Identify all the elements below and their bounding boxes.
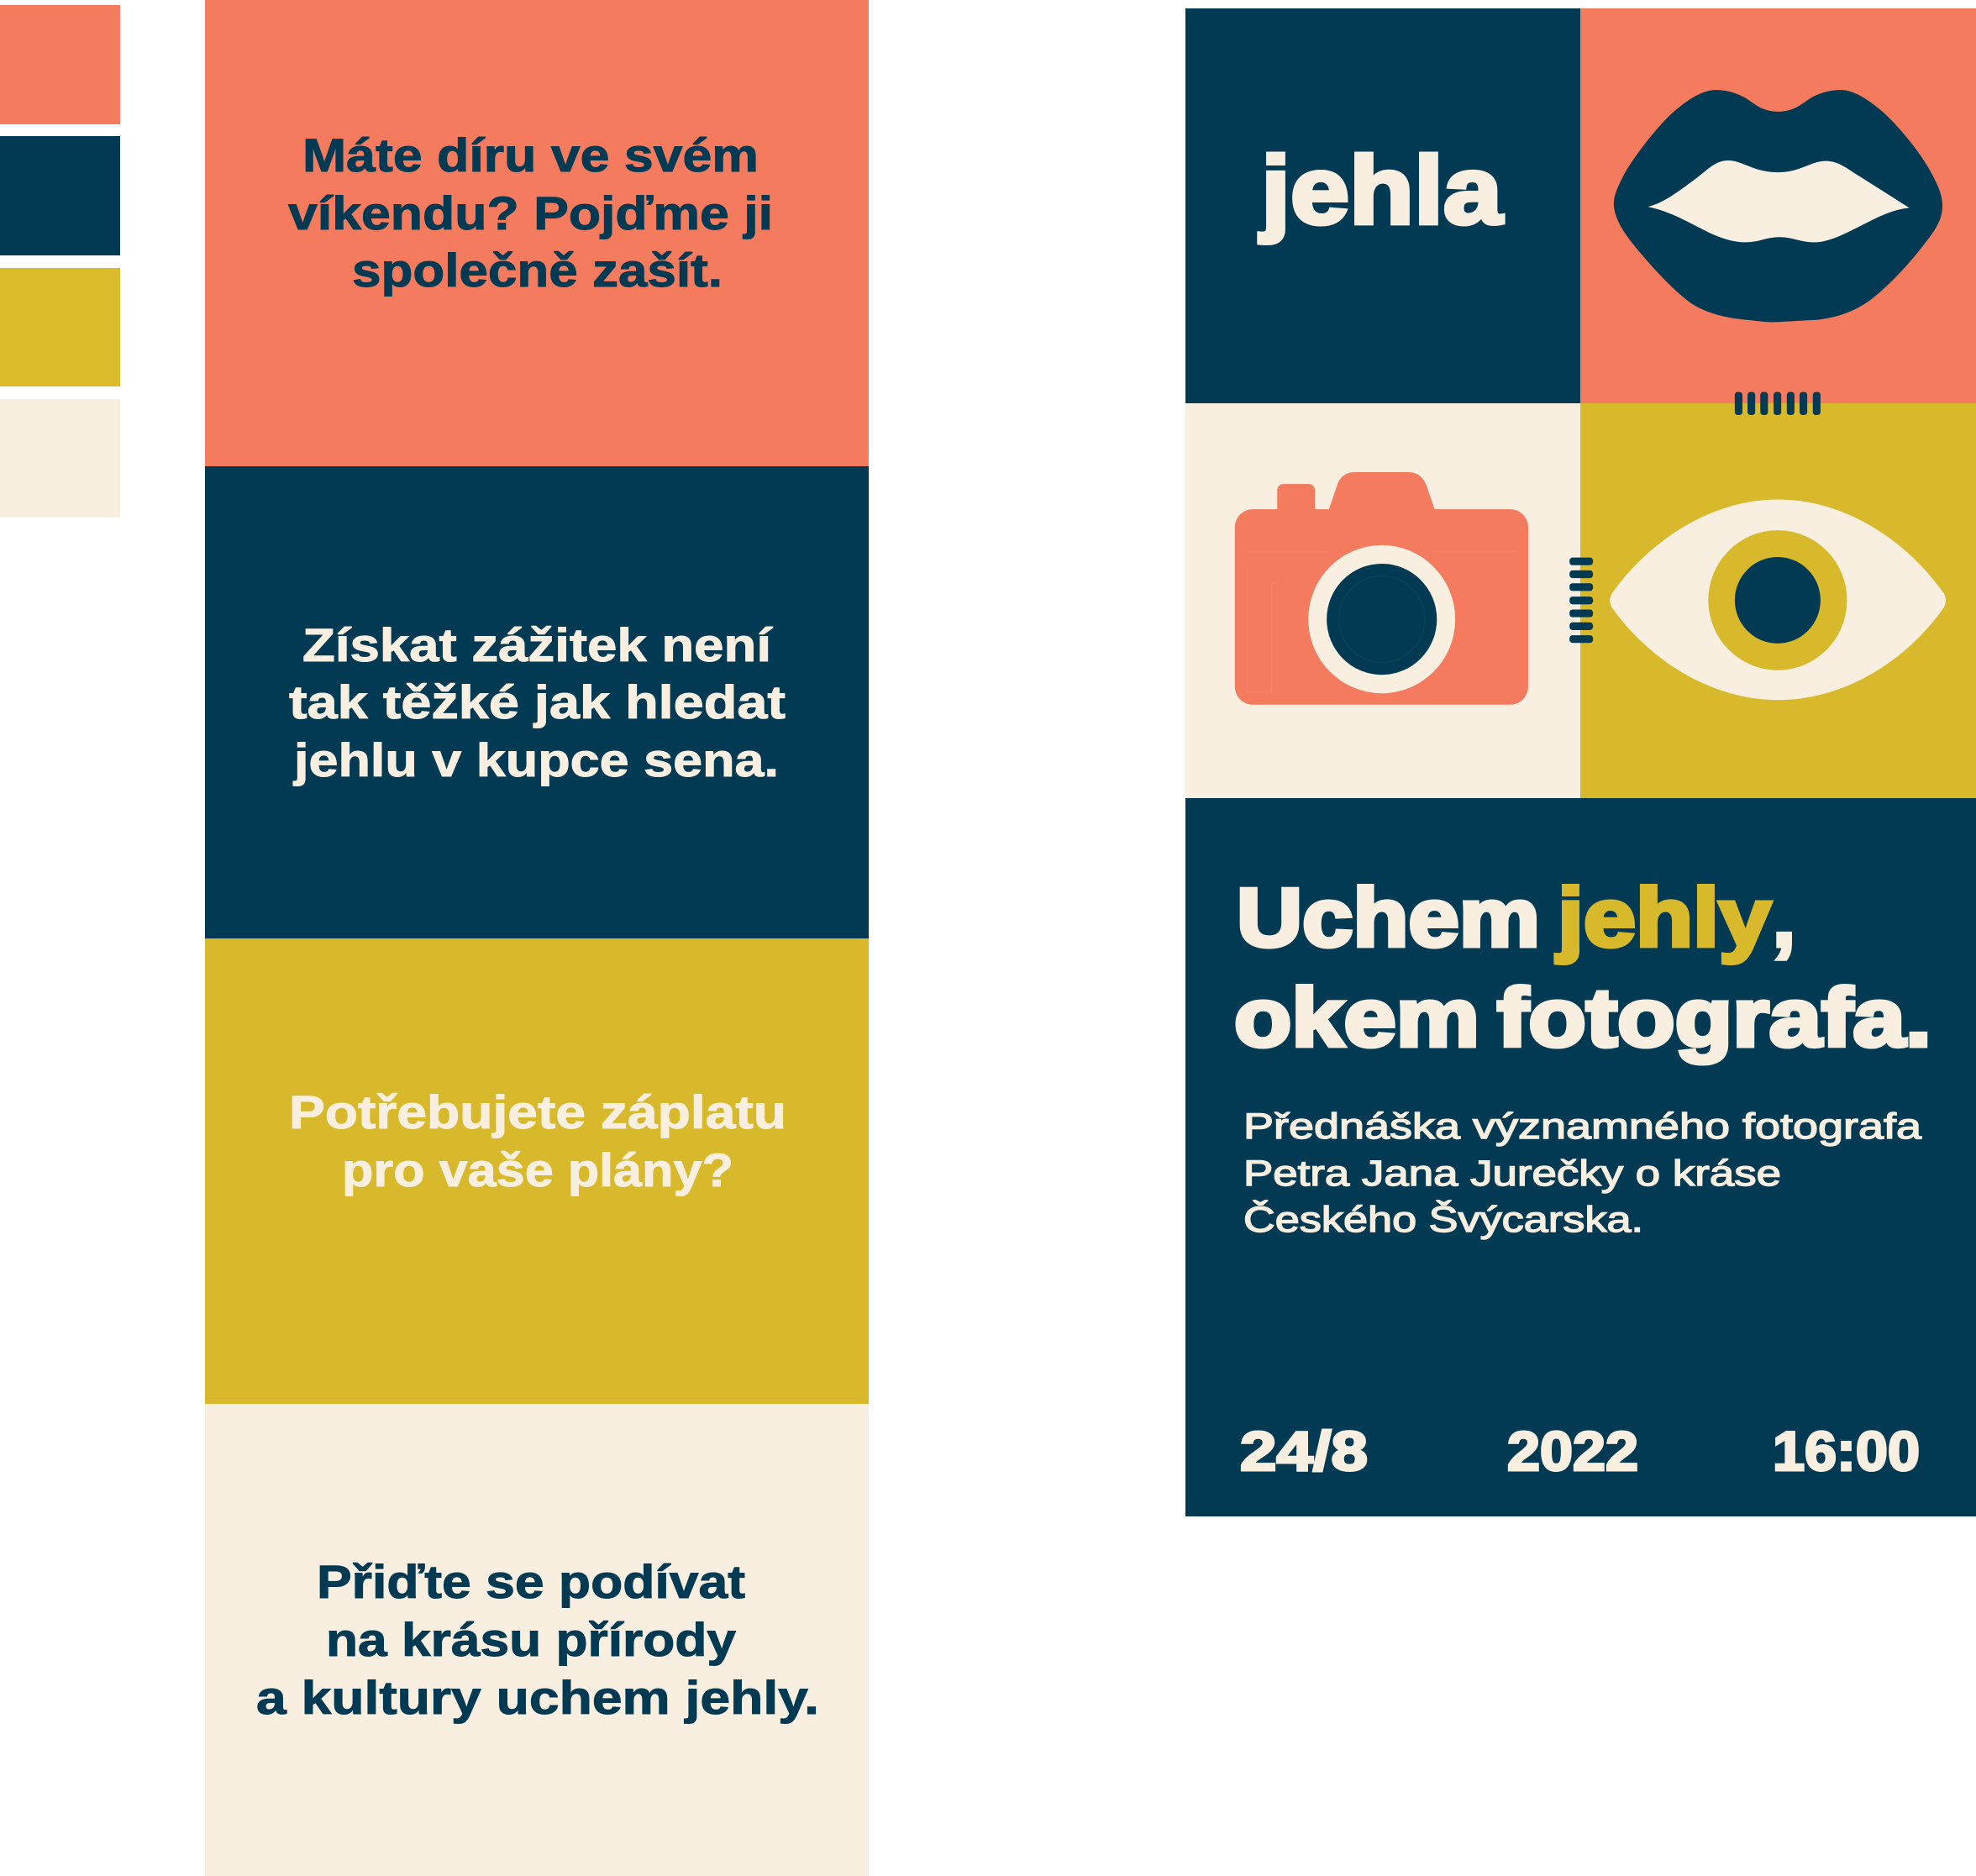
text: come and see: na krásu přírody: [326, 1613, 736, 1666]
logo: jehla: jehla: [1259, 138, 1504, 244]
headline: fotografa.: [1497, 971, 1931, 1064]
text: need a patch: [289, 1085, 786, 1196]
poster cell: eye: [1580, 403, 1976, 798]
swatch: coral: [0, 5, 120, 124]
text: come and see: Přiďte se podívat: [317, 1555, 745, 1608]
icon: camera: [1235, 472, 1528, 705]
headline: Uchem: [1237, 871, 1540, 964]
event date and time: 2022: [1507, 1420, 1638, 1482]
icon: horizontal stitches: [1735, 391, 1821, 415]
description text: Petra Jana Jurečky o kráse: [1243, 1153, 1781, 1194]
swatch: cream: [0, 399, 120, 518]
description text: [1243, 1106, 1921, 1240]
description text: Přednáška významného fotografa: [1243, 1106, 1921, 1147]
panel: cream slogan: [205, 1404, 869, 1876]
event date and time: 16:00: [1773, 1420, 1920, 1482]
text: need a patch: pro vaše plány?: [342, 1143, 733, 1196]
description text: Českého Švýcarska.: [1243, 1200, 1643, 1240]
headline: ,: [1773, 871, 1795, 964]
text: hole in your weekend: společně zašít.: [352, 244, 723, 297]
headline: jehly: [1556, 871, 1771, 964]
headline: okem: [1234, 971, 1479, 1064]
poster cell: lips: [1580, 8, 1976, 403]
colour palette swatches: [0, 5, 120, 518]
poster: [1185, 8, 1976, 1516]
text: need a patch: Potřebujete záplatu: [289, 1085, 786, 1138]
text: hole in your weekend: víkendu? Pojďme ji: [288, 187, 773, 239]
poster cell: logo: [1185, 8, 1580, 404]
text: getting an experience: tak těžké jak hledat: [289, 675, 786, 728]
text: hole in your weekend: Máte díru ve svém: [302, 129, 759, 181]
text: come and see: a kultury uchem jehly.: [256, 1671, 819, 1724]
panel: yellow slogan: [205, 938, 869, 1404]
event date and time: [1240, 1420, 1920, 1482]
headline: [1234, 871, 1931, 1064]
icon: vertical stitches: [1569, 558, 1593, 643]
panel: coral slogan: [205, 0, 869, 466]
text: hole in your weekend: [288, 129, 773, 297]
event date and time: 24/8: [1240, 1420, 1368, 1482]
text: come and see: [256, 1555, 819, 1724]
icon: eye: [1610, 499, 1946, 700]
swatch: yellow: [0, 268, 120, 386]
text: getting an experience: Získat zážitek není: [302, 618, 774, 671]
panel: event details: [1185, 798, 1976, 1516]
text: getting an experience: jehlu v kupce sena.: [293, 733, 779, 786]
panel: navy slogan: [205, 466, 869, 938]
swatch: navy: [0, 136, 120, 255]
icon: lips: [1614, 90, 1942, 322]
poster cell: camera: [1185, 403, 1580, 798]
text: getting an experience: [289, 618, 786, 786]
